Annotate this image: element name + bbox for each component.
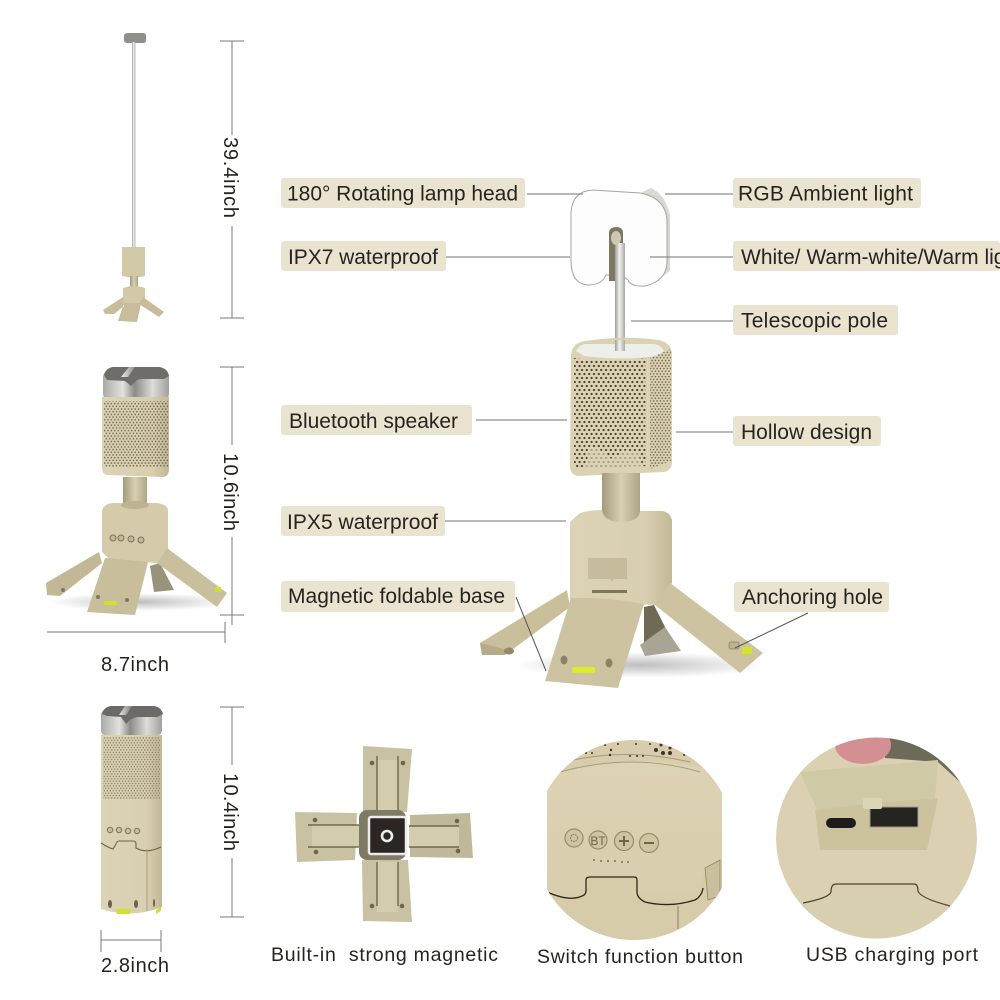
silver head — [101, 706, 162, 735]
neck small — [130, 276, 138, 288]
legs small — [103, 297, 164, 322]
telescopic pole — [615, 243, 625, 351]
neck collar — [121, 501, 149, 509]
shadow — [50, 593, 230, 611]
base block — [570, 510, 672, 605]
front leg holes — [560, 656, 612, 668]
flap tab — [863, 798, 882, 809]
body column — [101, 735, 162, 914]
label: Magnetic foldable base — [281, 581, 515, 612]
base — [102, 503, 168, 563]
right leg — [157, 548, 227, 607]
bottom arm — [362, 860, 412, 922]
silver head — [103, 367, 169, 399]
caption: magnet: Built-in strong magnetic — [271, 944, 498, 966]
dimension: 8.7inch: 8.7inch — [101, 654, 169, 676]
lamp head white face — [571, 190, 667, 286]
grille — [104, 401, 168, 467]
detail circle: USB port — [776, 738, 977, 938]
notch seam — [803, 884, 950, 906]
left leg — [480, 590, 570, 655]
detail: magnetic underside — [295, 746, 473, 922]
grille swirl gap — [585, 446, 643, 468]
detail circle: function buttons — [547, 740, 722, 940]
right leg hole — [729, 642, 739, 649]
right arm — [410, 813, 473, 858]
dimension: 39.4inch — [219, 41, 244, 318]
magnet plate — [369, 817, 406, 854]
dark background at top right — [885, 738, 960, 782]
sun icon — [570, 834, 578, 842]
function buttons — [107, 827, 140, 834]
notch panel — [549, 888, 722, 940]
dimension: 10.6inch: 10.6inch — [219, 453, 241, 531]
port recess — [815, 798, 938, 850]
top arm — [363, 746, 412, 812]
feet details — [108, 899, 155, 908]
top cap — [560, 740, 703, 772]
flap — [800, 760, 938, 810]
left arm — [295, 812, 357, 862]
front leg — [545, 598, 644, 688]
front grille — [574, 358, 646, 469]
USB-C port — [826, 818, 856, 828]
magnet ring — [382, 831, 392, 841]
centre hub — [359, 810, 406, 860]
label: 180° Rotating lamp head: 180° Rotating lamp head — [287, 182, 518, 206]
side notch — [705, 860, 720, 900]
minus — [644, 842, 654, 844]
seam lines — [560, 754, 700, 772]
base label plate — [588, 558, 627, 582]
label: RGB Ambient light: RGB Ambient light — [738, 182, 913, 206]
indicator dots — [593, 859, 629, 863]
pole hinge — [611, 231, 621, 245]
hinge plate — [640, 627, 681, 656]
left leg band — [46, 552, 102, 596]
dimension: 2.8inch — [101, 930, 169, 977]
head slot — [609, 227, 623, 281]
label: Hollow design — [733, 416, 881, 446]
neck — [123, 477, 147, 510]
label: Anchoring hole — [734, 582, 889, 612]
label: Magnetic foldable base: Magnetic foldable base — [288, 585, 505, 608]
label: IPX5 waterproof: IPX5 waterproof — [287, 511, 438, 534]
buttons — [565, 829, 658, 852]
label: IPX7 waterproof — [281, 241, 446, 271]
speaker body small — [122, 247, 145, 278]
dimension: 10.4inch: 10.4inch — [219, 773, 241, 851]
dimension: 10.4inch — [219, 707, 244, 917]
green LEDs — [116, 907, 161, 914]
label: IPX7 waterproof: IPX7 waterproof — [288, 246, 438, 269]
finger — [835, 738, 891, 764]
speaker body — [570, 338, 672, 476]
grille — [103, 737, 160, 799]
label: Bluetooth speaker: Bluetooth speaker — [289, 410, 458, 433]
seam — [101, 841, 161, 851]
right leg LED — [742, 647, 752, 654]
left leg — [46, 552, 102, 595]
dimension: 39.4inch: 39.4inch — [219, 137, 241, 218]
circle base — [776, 738, 977, 938]
label: Telescopic pole — [733, 305, 898, 335]
main product diagram — [480, 188, 765, 688]
green LED side — [215, 587, 221, 592]
lamp head rear silver edge — [642, 188, 670, 278]
right leg — [655, 583, 763, 673]
head top — [104, 367, 169, 386]
USB-A port — [870, 807, 918, 827]
label: Bluetooth speaker — [281, 405, 472, 435]
side grille — [650, 349, 671, 469]
speaker top opening — [576, 344, 664, 358]
front leg — [87, 558, 148, 615]
notch seam — [547, 877, 703, 905]
dimension: 10.6inch — [219, 367, 244, 625]
perforated body — [102, 397, 169, 477]
product: fully folded lamp — [101, 706, 163, 914]
extended pole — [132, 42, 135, 248]
label: Anchoring hole: Anchoring hole — [742, 586, 883, 609]
product: fully extended lamp — [103, 33, 164, 322]
perforation dots — [579, 743, 685, 757]
arm screws — [313, 761, 460, 908]
front leg LED — [572, 667, 595, 673]
ground shadow — [515, 652, 765, 678]
hinge metal — [150, 563, 174, 592]
product: collapsed pole lamp on tripod — [46, 367, 230, 615]
arm rails — [308, 756, 459, 906]
base small — [123, 286, 145, 305]
hinge dark — [644, 605, 668, 643]
function buttons — [110, 535, 144, 543]
arm inner channels — [312, 760, 459, 912]
head top — [102, 706, 163, 724]
left leg end shade — [480, 643, 508, 655]
left leg foot hole — [504, 648, 514, 654]
base of pole in opening — [615, 340, 625, 351]
label: Hollow design: Hollow design — [741, 421, 872, 444]
caption: USB: USB charging port — [806, 944, 979, 966]
circle base — [547, 740, 722, 940]
neck — [602, 473, 640, 523]
BT text: BT — [590, 834, 606, 848]
plus — [619, 836, 629, 846]
lamp head small — [124, 33, 146, 43]
leader lines — [445, 194, 808, 671]
dimension: 8.7inch — [47, 622, 225, 676]
caption: buttons: Switch function button — [537, 946, 743, 968]
shadow under base — [592, 590, 627, 593]
dimension: 2.8inch: 2.8inch — [101, 955, 169, 977]
green LED front — [104, 601, 117, 605]
label: Telescopic pole: Telescopic pole — [741, 310, 888, 332]
bottom panel — [802, 906, 949, 938]
